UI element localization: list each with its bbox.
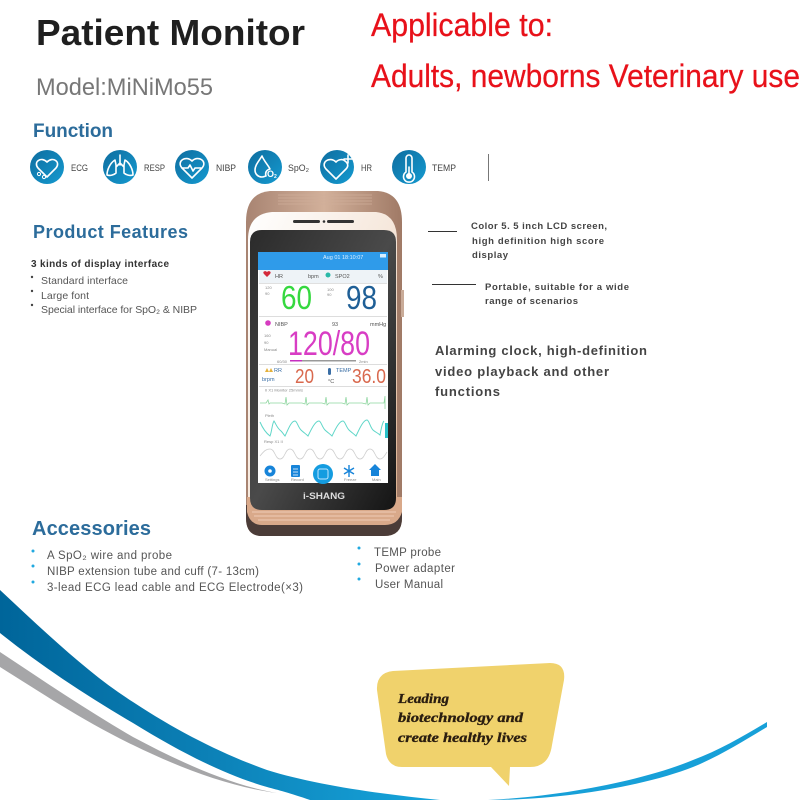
device screen xyxy=(250,230,396,510)
NIBP readout: NIBP xyxy=(275,322,288,328)
callout: portable: Portable, suitable for a wide xyxy=(485,282,629,293)
callout: portable: range of scenarios xyxy=(485,296,578,307)
NIBP readout xyxy=(264,320,386,364)
SpO2 readout: % xyxy=(378,274,383,280)
RR and TEMP readout xyxy=(262,366,386,388)
device body xyxy=(246,191,402,536)
accessories list left: NIBP extension tube and cuff (7- 13cm) xyxy=(47,566,259,578)
accessories list right: Power adapter xyxy=(375,563,455,575)
function icons row xyxy=(30,150,456,184)
product features list: Standard interface xyxy=(41,275,128,287)
callout: LCD screen: Color 5. 5 inch LCD screen, xyxy=(471,221,607,232)
model number: Model:MiNiMo55 xyxy=(36,74,213,101)
device: patient monitor: Resp X1 II xyxy=(264,439,283,444)
bubble text: create healthy lives xyxy=(398,731,528,746)
icon: TEMP xyxy=(392,150,426,184)
RR and TEMP readout: °C xyxy=(328,379,334,385)
title: Patient Monitor xyxy=(36,12,305,53)
callout: alarm clock and video playback: video playback and other xyxy=(435,364,609,379)
callout: LCD screen xyxy=(428,221,607,261)
bottom menu: Settings xyxy=(265,477,279,482)
function heading: Function xyxy=(33,121,113,142)
SpO2 readout: 100 xyxy=(327,287,334,292)
icon: SpO2: 2 xyxy=(274,174,277,180)
icon: ECG xyxy=(30,150,64,184)
device: patient monitor: Pleth xyxy=(265,413,274,418)
NIBP readout: 93 xyxy=(332,322,338,328)
product features list: Large font xyxy=(41,290,89,302)
icon: NIBP xyxy=(175,150,209,184)
label: RESP: RESP xyxy=(144,163,165,173)
device: patient monitor xyxy=(246,191,404,536)
SpO2 readout: SPO2 xyxy=(335,274,350,280)
callout: LCD screen: high definition high score xyxy=(472,236,604,247)
RR and TEMP readout: 36.0 xyxy=(352,366,386,388)
label: TEMP: TEMP xyxy=(432,163,456,173)
callout: portable xyxy=(432,282,629,307)
NIBP readout: Manual xyxy=(264,347,277,352)
HR readout xyxy=(263,271,319,316)
applicable to heading xyxy=(371,7,800,94)
accessories list left: A SpO₂ wire and probe xyxy=(47,550,172,562)
RR and TEMP readout: RR xyxy=(274,368,282,374)
bottom menu: Freeze xyxy=(344,477,357,482)
NIBP readout: 160 xyxy=(264,333,271,338)
SpO2 readout: 90 xyxy=(327,292,332,297)
accessories list right: User Manual xyxy=(375,579,443,591)
icon: SpO2: O xyxy=(267,169,274,179)
ECG waveform xyxy=(260,396,385,409)
bubble text: Leading xyxy=(397,692,449,707)
applicable to heading: Applicable to: xyxy=(371,7,553,43)
bubble text xyxy=(397,692,528,746)
HR readout: 60 xyxy=(281,279,312,316)
callout: LCD screen: display xyxy=(472,250,509,261)
bottom menu: Main xyxy=(372,477,381,482)
accessories list left: 3-lead ECG lead cable and ECG Electrode(×3) xyxy=(47,582,303,594)
HR readout: 90 xyxy=(265,291,270,296)
speech bubble xyxy=(377,663,564,786)
SpO2 readout: 98 xyxy=(346,279,377,316)
NIBP readout: 120/80 xyxy=(288,325,370,363)
pleth waveform xyxy=(260,420,384,436)
icon: SpO2 xyxy=(248,150,282,184)
NIBP readout: mmHg xyxy=(370,322,386,328)
bubble text: biotechnology and xyxy=(398,711,524,726)
accessories list right: TEMP probe xyxy=(374,547,441,559)
label: NIBP: NIBP xyxy=(216,163,236,173)
grey swoosh xyxy=(0,652,277,793)
icon: HR xyxy=(320,150,354,184)
NIBP readout: 90 xyxy=(264,340,269,345)
accessories heading: Accessories xyxy=(32,518,151,540)
bottom menu: Record xyxy=(291,477,304,482)
callout: alarm clock and video playback: functions xyxy=(435,384,500,399)
label: SpO2: SpO₂ xyxy=(288,163,309,173)
HR readout: 120 xyxy=(265,285,272,290)
label: HR: HR xyxy=(361,163,372,173)
product features list: 3 kinds of display interface xyxy=(31,259,169,270)
RR and TEMP readout: TEMP xyxy=(336,368,352,374)
HR readout: HR xyxy=(275,274,283,280)
NIBP readout: 60/30 xyxy=(277,359,288,364)
blue swoosh left xyxy=(0,590,440,800)
RR and TEMP readout: 20 xyxy=(295,366,314,388)
device: patient monitor: II X1 Monitor 25mm/s xyxy=(265,388,303,392)
blue swoosh right xyxy=(488,722,767,800)
resp waveform xyxy=(260,449,387,459)
icon: RESP xyxy=(103,150,137,184)
product features heading: Product Features xyxy=(33,222,188,242)
RR and TEMP readout: brpm xyxy=(262,377,275,383)
brand logo: i-SHANG xyxy=(303,491,345,501)
NIBP readout: 2min xyxy=(359,359,368,364)
accessories list left xyxy=(32,550,303,594)
SpO2 readout xyxy=(326,272,383,316)
HR readout: bpm xyxy=(308,274,319,280)
callout: alarm clock and video playback: Alarming clock, high-definition xyxy=(435,343,647,358)
bottom menu xyxy=(264,464,381,484)
callout: alarm clock and video playback xyxy=(435,343,647,399)
product features list xyxy=(31,259,197,316)
accessories list right xyxy=(358,546,455,591)
product features list: Special interface for SpO₂ & NIBP xyxy=(41,304,197,316)
device: patient monitor: Aug 01 18:10:07 xyxy=(323,255,363,261)
label: ECG: ECG xyxy=(71,163,88,173)
